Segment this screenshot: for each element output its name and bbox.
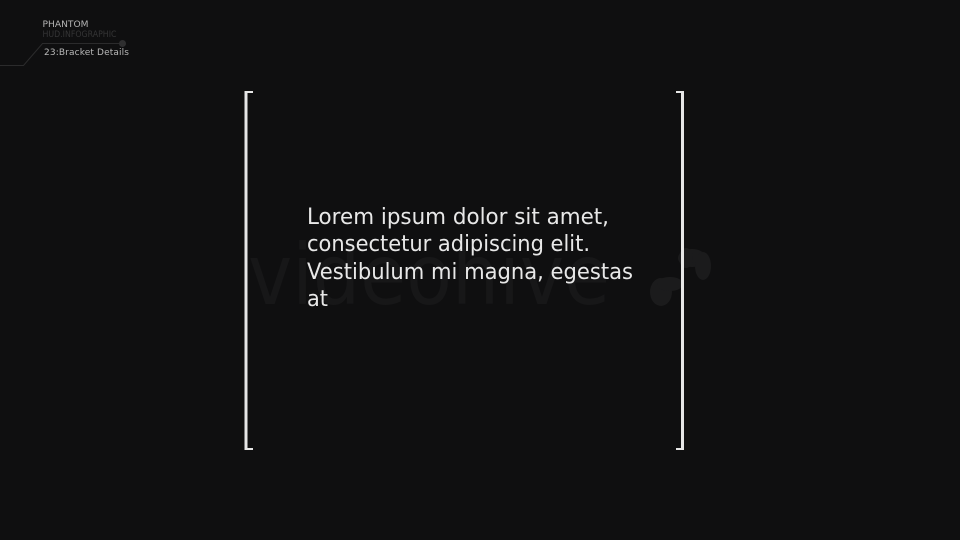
section label: 23:Bracket Details — [44, 48, 129, 58]
icon: watermark logo — [650, 248, 711, 306]
right bracket — [676, 91, 684, 450]
body text — [307, 205, 633, 312]
left bracket — [244, 91, 253, 450]
leader line with dot — [0, 40, 126, 66]
body text: Lorem ipsum dolor sit amet, — [307, 205, 609, 230]
subtitle: HUD.INFOGRAPHIC: HUD.INFOGRAPHIC — [42, 30, 117, 40]
body text: at — [307, 287, 328, 312]
body text: Vestibulum mi magna, egestas — [307, 260, 633, 285]
title: PHANTOM: PHANTOM — [42, 20, 88, 30]
header: title block — [0, 20, 129, 66]
watermark: videohive: videohive — [248, 226, 610, 324]
body text: consectetur adipiscing elit. — [307, 232, 590, 257]
